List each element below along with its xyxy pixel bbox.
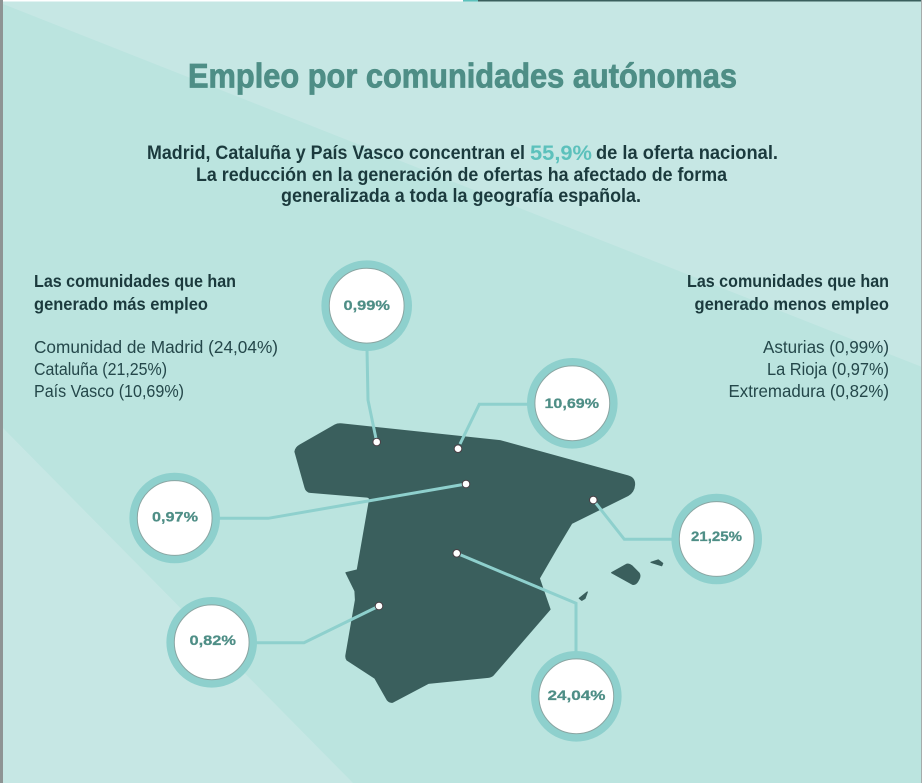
- panel: communities with most employment: País Vasco (10,69%): [34, 381, 184, 401]
- panel: communities with most employment: Cataluña (21,25%): [34, 359, 167, 379]
- callout: Cataluña 21,25%: [590, 496, 758, 580]
- map of Spain: [295, 424, 663, 702]
- panel: communities with most employment: [34, 271, 278, 401]
- callout: País Vasco 10,69%: [454, 362, 614, 453]
- panel: communities with least employment: [687, 271, 889, 401]
- callout: Madrid 24,04%: 24,04%: [548, 687, 606, 703]
- panel: communities with most employment: generado más empleo: [34, 294, 208, 314]
- callout: Madrid 24,04%: [453, 550, 618, 738]
- callout: País Vasco 10,69%: 10,69%: [544, 395, 600, 411]
- panel: communities with least employment: La Rioja (0,97%): [767, 359, 889, 379]
- callout: La Rioja 0,97%: 0,97%: [152, 508, 199, 524]
- callout: Extremadura 0,82%: [170, 601, 383, 684]
- intro text: 55,9%: [530, 142, 592, 165]
- callout: Cataluña 21,25%: 21,25%: [691, 528, 743, 544]
- panel: communities with least employment: Las comunidades que han: [687, 271, 889, 291]
- intro text: Madrid, Cataluña y País Vasco concentran el: [147, 143, 525, 164]
- panel: communities with least employment: Extremadura (0,82%): [728, 381, 889, 401]
- intro text: de la oferta nacional.: [596, 143, 778, 164]
- callout: La Rioja 0,97%: [133, 477, 470, 559]
- panel: communities with least employment: generado menos empleo: [694, 294, 889, 314]
- panel: communities with most employment: Las comunidades que han: [34, 271, 236, 291]
- intro text: La reducción en la generación de ofertas ha afectado de forma: [196, 165, 727, 186]
- intro text: generalizada a toda la geografía española.: [281, 186, 641, 207]
- intro text: [147, 142, 778, 207]
- callout: Asturias 0,99%: [325, 264, 408, 446]
- panel: communities with most employment: Comunidad de Madrid (24,04%): [34, 337, 278, 357]
- panel: communities with least employment: Asturias (0,99%): [763, 337, 889, 357]
- callout: Extremadura 0,82%: 0,82%: [190, 632, 237, 648]
- title: Empleo por comunidades autónomas: [188, 58, 737, 96]
- callout: Asturias 0,99%: 0,99%: [344, 297, 391, 313]
